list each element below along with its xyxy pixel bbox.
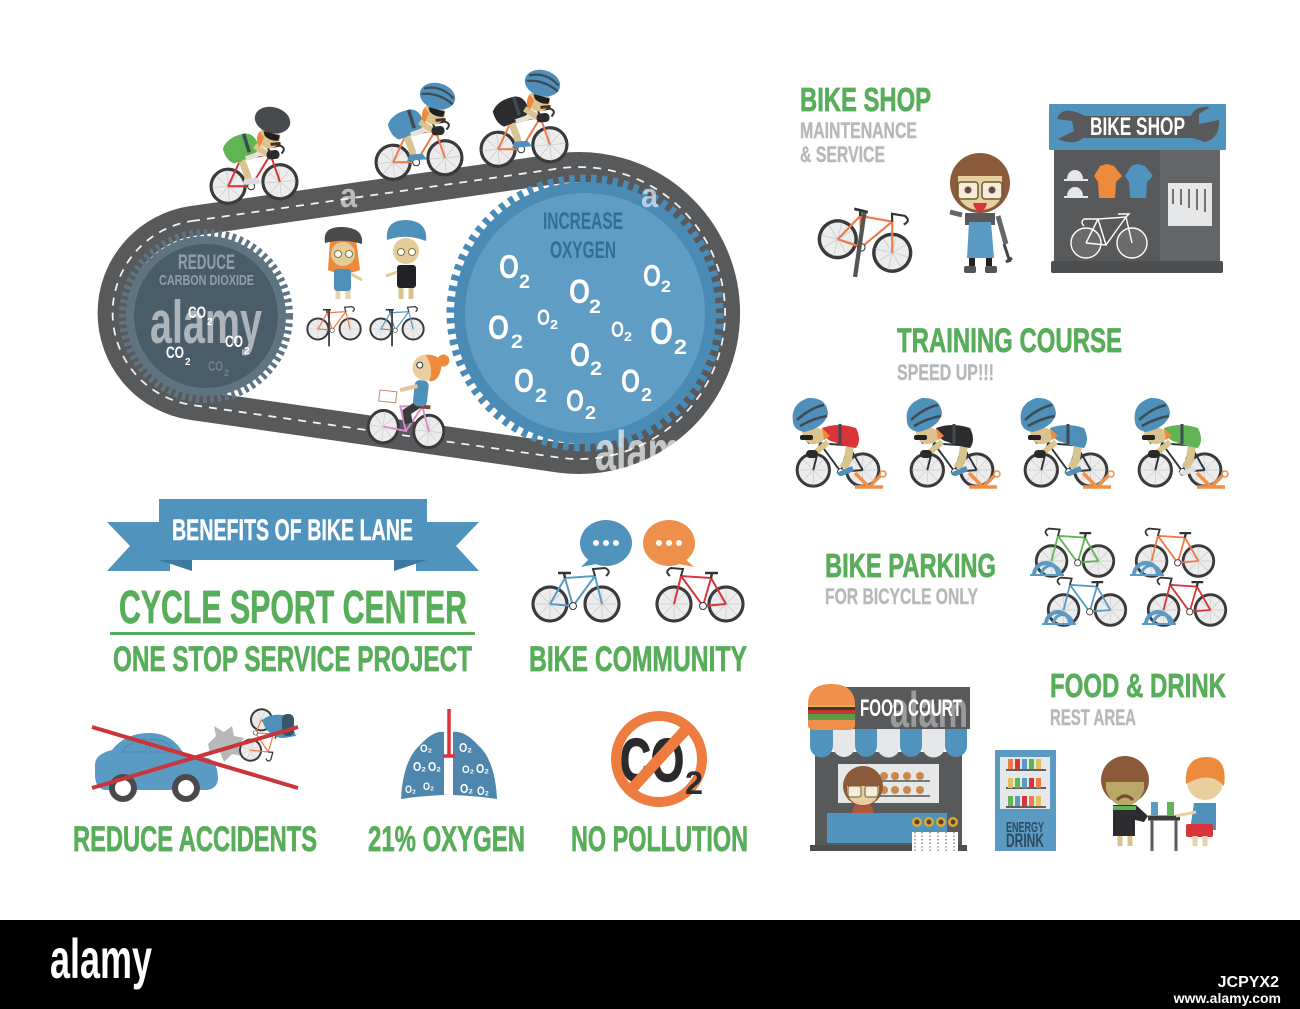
footer url: www.alamy.com (1173, 990, 1281, 1006)
rider: black jersey (489, 63, 569, 149)
icon: red bike (657, 568, 743, 621)
cyclist: black jersey (478, 107, 568, 168)
co2 molecules: 2 (244, 346, 250, 357)
icon: car (95, 733, 218, 799)
figure: boy with blue helmet (386, 220, 426, 299)
icon: red cross (92, 727, 298, 788)
label: no pollution: NO POLLUTION (571, 820, 748, 859)
gear: increase oxygen (451, 179, 719, 447)
oxygen molecules: O (566, 383, 584, 418)
parked bike: red (1142, 578, 1226, 625)
co2 molecules: 2 (207, 317, 213, 328)
building: food court (808, 682, 970, 851)
oxygen molecules: O (650, 311, 673, 352)
rider: blue jersey (384, 76, 464, 162)
oxygen molecules: 2 (550, 317, 558, 332)
parked bike: orange (1130, 529, 1214, 576)
icon: lungs: O₂ (428, 759, 441, 774)
shop sign text: BIKE SHOP (1090, 113, 1185, 141)
subtitle: one stop service project: ONE STOP SERVICE PROJECT (113, 640, 472, 679)
icon: burger (808, 684, 855, 730)
gear: increase oxygen: OXYGEN (550, 237, 616, 264)
watermark: road letter left: a (340, 177, 358, 215)
icon: wrench sign (1057, 107, 1219, 142)
icon: lungs: O₂ (462, 764, 474, 776)
parked bike: green (1030, 529, 1114, 576)
icon: crash burst (208, 726, 244, 762)
food display window (838, 764, 939, 803)
co2 molecules: 2 (224, 368, 229, 378)
co2 molecules: CO (208, 358, 223, 375)
icon: lungs: O₂ (420, 743, 432, 755)
oxygen molecules: 2 (590, 359, 602, 380)
oxygen molecules: 2 (661, 277, 671, 296)
oxygen molecules: O (643, 258, 661, 293)
icon: lungs: O₂ (460, 781, 473, 796)
subheading: service: & SERVICE (800, 142, 885, 167)
icon: lungs: O₂ (423, 781, 434, 793)
rider on trainer: green (1135, 398, 1228, 487)
panel: training course (793, 322, 1228, 487)
rider on trainer: red (793, 398, 886, 487)
oxygen molecules: O (569, 273, 590, 311)
subheading: for bicycle only: FOR BICYCLE ONLY (825, 584, 978, 609)
icon: white bike (1071, 214, 1147, 258)
footer bar (0, 920, 1300, 1009)
oxygen molecules: 2 (585, 403, 596, 423)
title: cycle sport center: CYCLE SPORT CENTER (119, 581, 467, 633)
cyclist: green jersey (208, 144, 298, 205)
oxygen molecules: 2 (535, 386, 547, 407)
icon: orange speech bubble (643, 520, 695, 567)
panel: no pollution (571, 716, 748, 859)
oxygen molecules: O (611, 317, 624, 342)
ribbon folds (159, 560, 427, 571)
vending label: energy: ENERGY (1006, 819, 1044, 836)
co2 molecules (166, 303, 250, 378)
figure: mechanic (950, 153, 1012, 273)
oxygen molecules: 2 (674, 336, 687, 359)
ribbon body (159, 499, 427, 560)
vending machine (995, 750, 1056, 852)
watermark: road letter right: a (641, 177, 659, 215)
counter (827, 813, 947, 843)
footer image id: JCPYX2 (1218, 974, 1279, 991)
figure: girl with dark helmet (325, 227, 362, 299)
panel: 21% oxygen (368, 709, 525, 859)
oxygen molecules: 2 (641, 385, 652, 405)
panel: bike parking (825, 529, 1226, 625)
oxygen molecules: 2 (589, 297, 601, 318)
icon: flipped cyclist (237, 706, 286, 768)
panel: reduce accidents (73, 706, 317, 859)
icon: lungs: O₂ (405, 784, 416, 796)
drink cans (1008, 759, 1041, 806)
panel: bike community (529, 520, 747, 679)
icon: lungs: O₂ (459, 740, 472, 755)
oxygen molecules: O (514, 362, 534, 399)
label: bike community: BIKE COMMUNITY (529, 640, 747, 679)
awning (810, 729, 967, 758)
icon: lungs (401, 709, 497, 799)
heading: bike parking: BIKE PARKING (825, 547, 996, 584)
heading: carbon dioxide: CARBON DIOXIDE (159, 272, 254, 289)
watermark: food court: alam (890, 682, 968, 738)
co2 molecules: CO (166, 343, 184, 362)
ribbon text: BENEFITS OF BIKE LANE (172, 514, 413, 547)
watermark: lower logo: alam (595, 419, 681, 482)
icon: no co2 sign: 2 (685, 765, 703, 801)
heading: training course: TRAINING COURSE (897, 322, 1122, 360)
oxygen molecules: 2 (519, 272, 530, 293)
icon: no co2 sign (616, 716, 703, 802)
icon: lungs: O₂ (477, 784, 489, 798)
rider on trainer: black (907, 398, 1000, 487)
figures: man and woman at table (1101, 756, 1225, 851)
icon: wrench panel (1168, 183, 1212, 226)
watermark: centre logo: alamy (150, 289, 262, 356)
oxygen molecules: O (499, 248, 519, 285)
helmet of flipped cyclist (262, 714, 296, 738)
oxygen molecules: O (570, 336, 590, 373)
icon: helmets (1064, 170, 1088, 198)
co2 molecules: CO (188, 303, 206, 322)
icon: bike on repair stand (812, 197, 919, 289)
rider: green jersey (219, 100, 299, 186)
icon: sunflowers (912, 817, 958, 851)
icon: orange jersey (1094, 164, 1122, 198)
icon: blue jersey (1125, 164, 1153, 198)
icon: blue speech bubble (580, 520, 632, 567)
oxygen molecules: 2 (511, 332, 523, 353)
heading: food and drink: FOOD & DRINK (1050, 667, 1226, 704)
panel: title ribbon (107, 499, 479, 571)
oxygen molecules: O (488, 309, 509, 347)
parked bike: blue (1042, 578, 1126, 625)
icon: blue bike (533, 568, 619, 621)
panel: food and drink (808, 667, 1226, 852)
vending label: drink: DRINK (1006, 831, 1044, 852)
subheading: rest area: REST AREA (1050, 705, 1136, 730)
oxygen molecules: O (621, 363, 640, 399)
oxygen molecules: O (537, 305, 550, 330)
label: 21% oxygen: 21% OXYGEN (368, 820, 525, 859)
title rule (110, 632, 475, 635)
heading: increase oxygen: INCREASE (543, 208, 623, 235)
subheading: maintenance: MAINTENANCE (800, 118, 917, 143)
figure: food vendor (843, 766, 883, 813)
label: reduce accidents: REDUCE ACCIDENTS (73, 820, 317, 859)
heading: reduce: REDUCE (178, 251, 235, 274)
small bike: orange on stand (307, 307, 361, 346)
oxygen molecules (488, 248, 687, 423)
icon: lungs: O₂ (476, 761, 489, 776)
subheading: speed up: SPEED UP!!! (897, 360, 994, 385)
panel: bike lane belt diagram (113, 63, 725, 482)
food court sign text: FOOD COURT (860, 695, 962, 722)
building: bike shop (1049, 104, 1226, 273)
small bike: blue on stand (370, 307, 424, 346)
heading: bike shop: BIKE SHOP (800, 81, 931, 118)
co2 molecules: 2 (185, 357, 191, 368)
oxygen molecules: 2 (624, 329, 632, 344)
ribbon tails (107, 522, 479, 571)
co2 molecules: CO (225, 332, 243, 351)
rider on trainer: blue (1021, 398, 1114, 487)
gear: reduce carbon dioxide (123, 233, 289, 399)
icon: no co2 sign: CO (620, 727, 684, 794)
road belt (113, 167, 725, 459)
cyclist: blue jersey (373, 120, 463, 181)
footer logo: alamy (50, 927, 152, 990)
icon: lungs: O₂ (413, 759, 426, 774)
panel: bike shop (800, 81, 1226, 289)
cyclist: woman with basket (367, 347, 452, 449)
